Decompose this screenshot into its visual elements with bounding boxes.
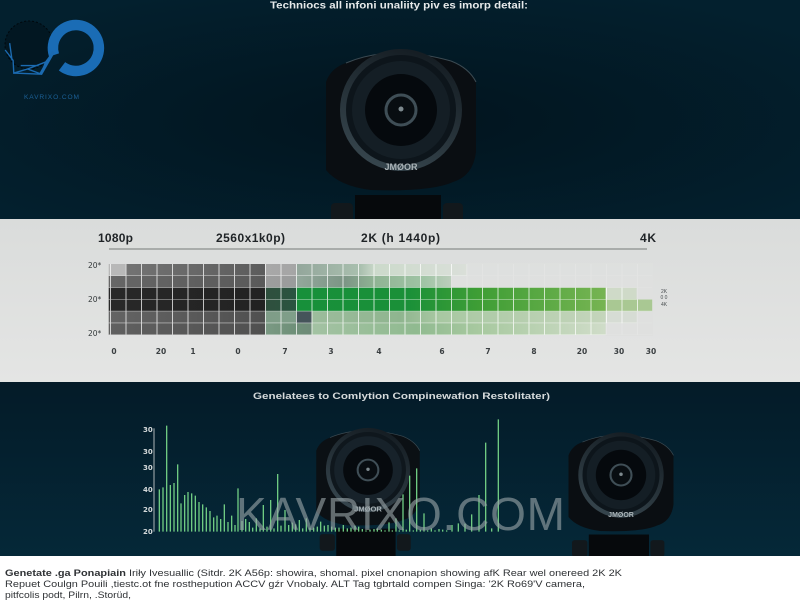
chart axis labels (143, 426, 153, 536)
camera: top centre: JMØOR (384, 162, 418, 172)
x axis labels: 30 (646, 347, 656, 356)
resolution labels: 2K (h 1440p) (361, 231, 440, 245)
caption text (5, 568, 623, 600)
camera: bottom right: JMØOR (608, 512, 634, 519)
x axis labels: 0 (235, 347, 241, 356)
chart axis labels: 40 (143, 486, 153, 494)
x axis labels: 20 (577, 347, 587, 356)
chart axis labels: 30 (143, 464, 153, 472)
x axis labels: 1 (190, 347, 196, 356)
y axis labels: 20* (88, 329, 102, 338)
bar chart (143, 419, 498, 536)
watermark: KAVRIXO.COM (236, 488, 565, 540)
logo caption: KAVRIXO.COM (24, 94, 79, 101)
y axis labels (88, 261, 102, 338)
side legend: 2K (661, 289, 668, 295)
chart axis labels: 30 (143, 426, 153, 434)
x axis labels: 3 (328, 347, 334, 356)
panel: top camera banner (0, 0, 800, 235)
x axis labels: 20 (156, 347, 166, 356)
heatmap grid (109, 263, 653, 336)
side legend: 0 0 (661, 295, 668, 301)
logo: blue ring and network hand (5, 21, 99, 74)
chart axis labels: 20 (143, 528, 153, 536)
side legend (661, 289, 668, 308)
x axis labels: 8 (531, 347, 537, 356)
panel: caption (0, 556, 800, 600)
x axis labels: 7 (282, 347, 288, 356)
x axis labels: 0 (111, 347, 117, 356)
panel: resolution pixel grid (0, 219, 800, 382)
camera: bottom centre: JMØOR (354, 504, 382, 513)
chart axis labels: 30 (143, 448, 153, 456)
resolution labels: 4K (640, 231, 656, 245)
caption text: Repuet Coulgn Pouili ,tiestc.ot fne rosthepution ACCV gźr Vnobaly. ALT Tag tgbrtald compen Singa: '2K Ro69'V camera, (5, 579, 585, 590)
resolution labels: 1080p (98, 231, 133, 245)
chart axis labels: 20 (143, 506, 153, 514)
y axis labels: 20* (88, 261, 102, 270)
x axis labels: 6 (439, 347, 445, 356)
resolution labels (98, 231, 656, 245)
camera: top centre (326, 49, 476, 235)
chart heading: Genelatees to Comlytion Compinewafion Restolitater) (253, 391, 550, 402)
y axis labels: 20* (88, 295, 102, 304)
x axis labels: 30 (614, 347, 624, 356)
panel: bottom chart with cameras (0, 382, 800, 562)
camera: bottom centre (316, 428, 420, 556)
x axis labels: 4 (376, 347, 382, 356)
x axis labels (111, 347, 656, 356)
camera: bottom right (568, 432, 674, 562)
side legend: 4K (661, 302, 668, 308)
caption text: Genetate .ga Ponapiain Iriły Ivesuallic (Sitdr. 2K A56p: showira, shomal. pixel cnonapion showing afK Rear wel onereed 2K 2K (5, 568, 623, 579)
x axis labels: 7 (485, 347, 491, 356)
resolution labels: 2560x1k0p) (216, 231, 285, 245)
